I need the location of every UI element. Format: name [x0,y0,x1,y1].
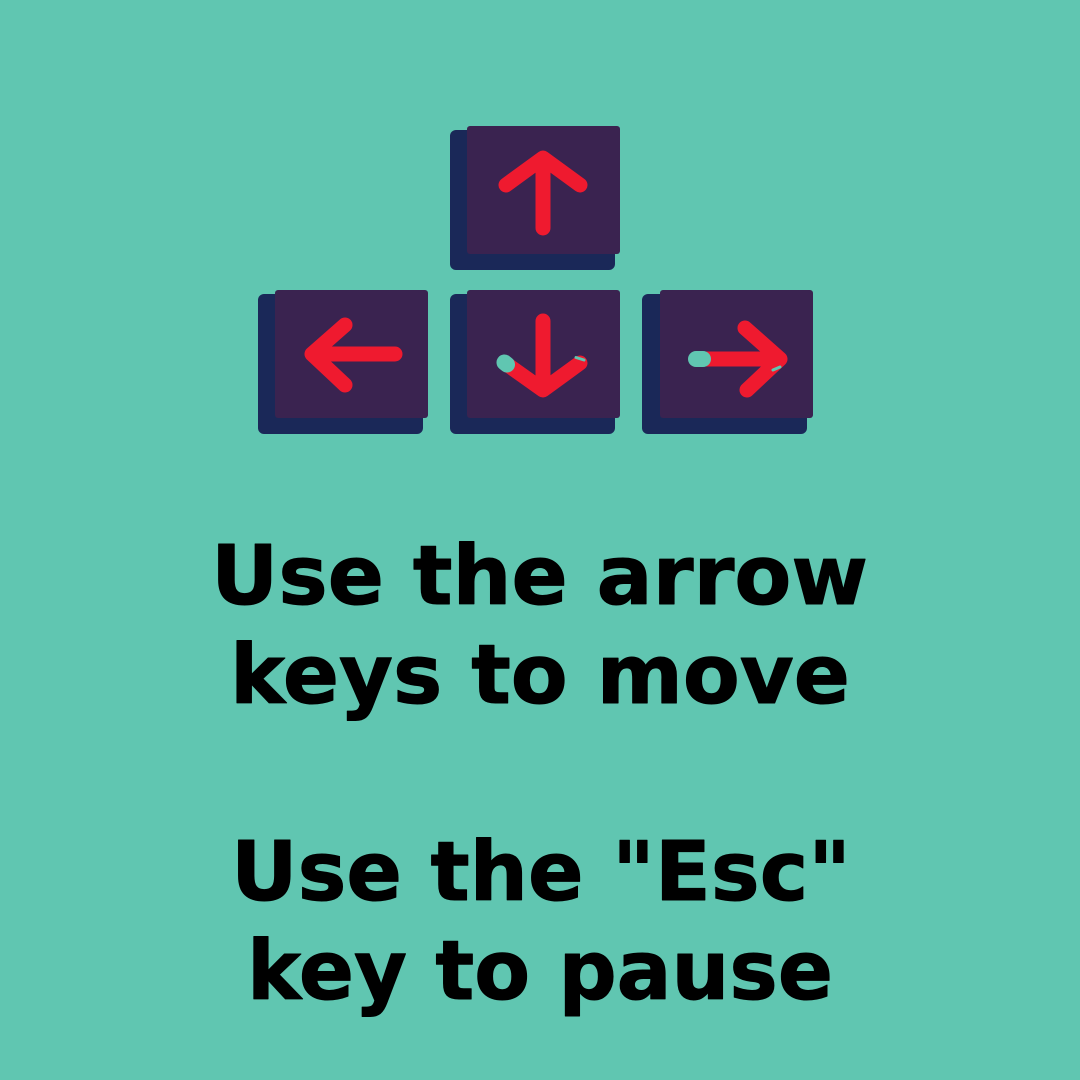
icon: arrow keys cluster [258,126,813,434]
icon: left arrow key [258,290,428,434]
text: movement instruction: Use the arrow [211,529,868,624]
text: pause instruction: key to pause [247,924,833,1019]
text: movement instruction: keys to move [230,628,850,723]
icon: down arrow key [450,290,620,434]
text: movement instruction [211,529,868,723]
text: pause instruction [231,825,851,1019]
text: pause instruction: Use the "Esc" [231,825,851,920]
icon: right arrow key [642,290,813,434]
icon: up arrow key [450,126,620,270]
